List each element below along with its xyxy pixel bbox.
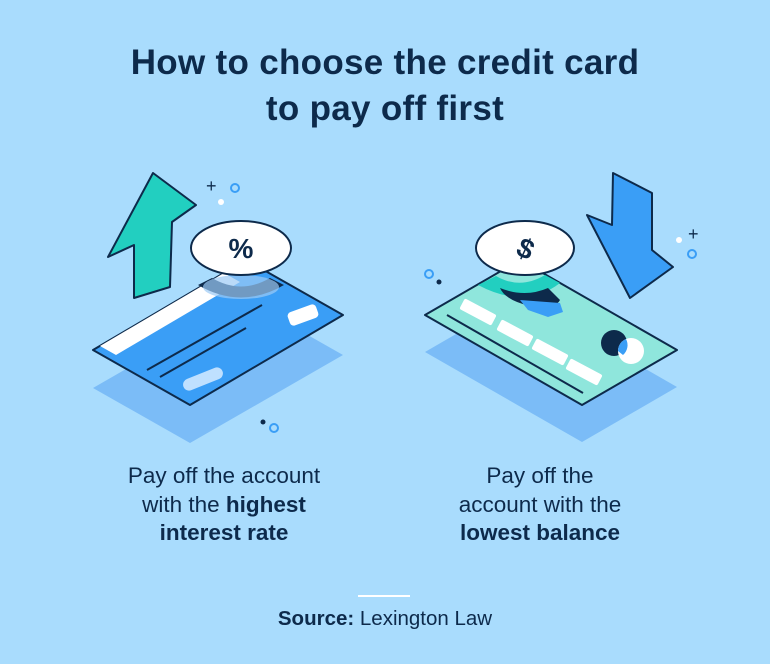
- title: to pay off first: [266, 89, 504, 128]
- up arrow: [108, 173, 196, 298]
- right sparkles: [425, 224, 699, 284]
- caption right: Pay off the: [486, 463, 594, 488]
- title: How to choose the credit card: [131, 43, 639, 82]
- caption left: Pay off the account: [128, 463, 320, 488]
- dollar badge: [476, 221, 574, 275]
- divider: [358, 595, 410, 597]
- percent badge: [191, 221, 291, 275]
- left sparkles: [206, 176, 278, 432]
- caption left: [128, 463, 320, 545]
- left card: [93, 260, 343, 405]
- caption right: [459, 463, 621, 545]
- title: [131, 43, 639, 128]
- down arrow: [587, 173, 673, 298]
- dollar badge: $: [512, 231, 540, 266]
- caption left: interest rate: [160, 520, 288, 545]
- right shadow: [425, 297, 677, 442]
- caption right: account with the: [459, 492, 621, 516]
- caption right: lowest balance: [460, 520, 620, 545]
- right card: [425, 260, 677, 405]
- source: Source: Lexington Law: [278, 607, 492, 630]
- left shadow: [93, 300, 343, 443]
- percent badge: %: [229, 233, 254, 264]
- left sparkles: +: [206, 176, 217, 196]
- right sparkles: +: [688, 224, 699, 244]
- caption left: with the highest: [142, 492, 306, 516]
